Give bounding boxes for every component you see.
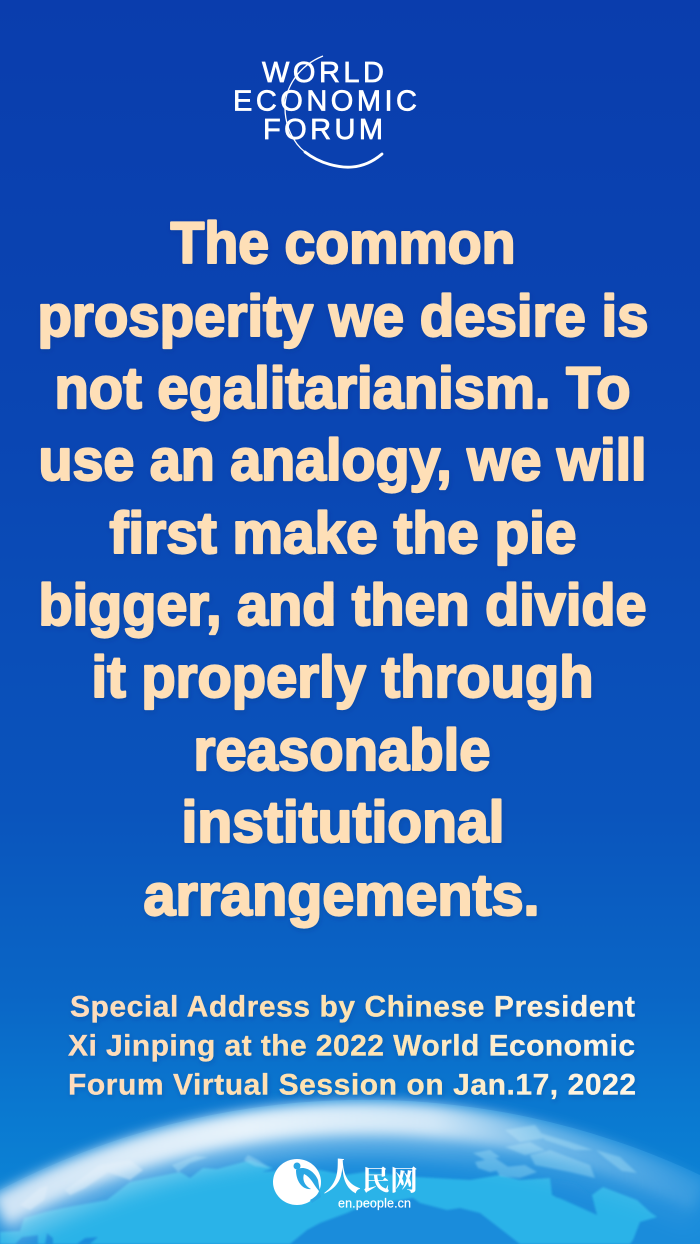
globe land	[0, 1125, 657, 1244]
attribution: Forum Virtual Session on Jan.17, 2022	[68, 1068, 636, 1102]
main quote: The common	[170, 211, 516, 276]
globe ocean	[0, 1100, 700, 1244]
logo characters: 人	[323, 1157, 361, 1199]
logo characters	[323, 1157, 418, 1199]
logo wordmark: ECONOMIC	[233, 86, 417, 118]
logo arc	[285, 56, 323, 152]
main quote: prosperity we desire is	[38, 284, 648, 349]
main quote: institutional	[182, 790, 504, 855]
logo wordmark: FORUM	[263, 114, 383, 146]
main quote	[38, 211, 648, 928]
logo characters: 网	[390, 1165, 418, 1197]
main quote: first make the pie	[110, 501, 576, 566]
main quote: it properly through	[92, 645, 594, 710]
globe	[0, 1100, 700, 1244]
attribution: Xi Jinping at the 2022 World Economic	[68, 1030, 635, 1062]
logo: People's Daily Online	[273, 1157, 418, 1210]
main quote: bigger, and then divide	[38, 573, 646, 638]
logo wordmark: WORLD	[262, 57, 384, 89]
logo url: en.people.cn	[338, 1196, 411, 1210]
logo: World Economic Forum	[233, 56, 417, 167]
main quote: use an analogy, we will	[38, 428, 646, 493]
logo characters: 民	[362, 1165, 390, 1197]
attribution: Special Address by Chinese President	[70, 990, 635, 1024]
logo wordmark	[233, 57, 417, 146]
attribution	[68, 990, 636, 1102]
atmosphere band	[0, 1131, 700, 1225]
main quote: not egalitarianism. To	[54, 356, 630, 421]
icon: swirl	[273, 1159, 321, 1205]
main quote: arrangements.	[144, 863, 540, 928]
main quote: reasonable	[194, 718, 490, 783]
